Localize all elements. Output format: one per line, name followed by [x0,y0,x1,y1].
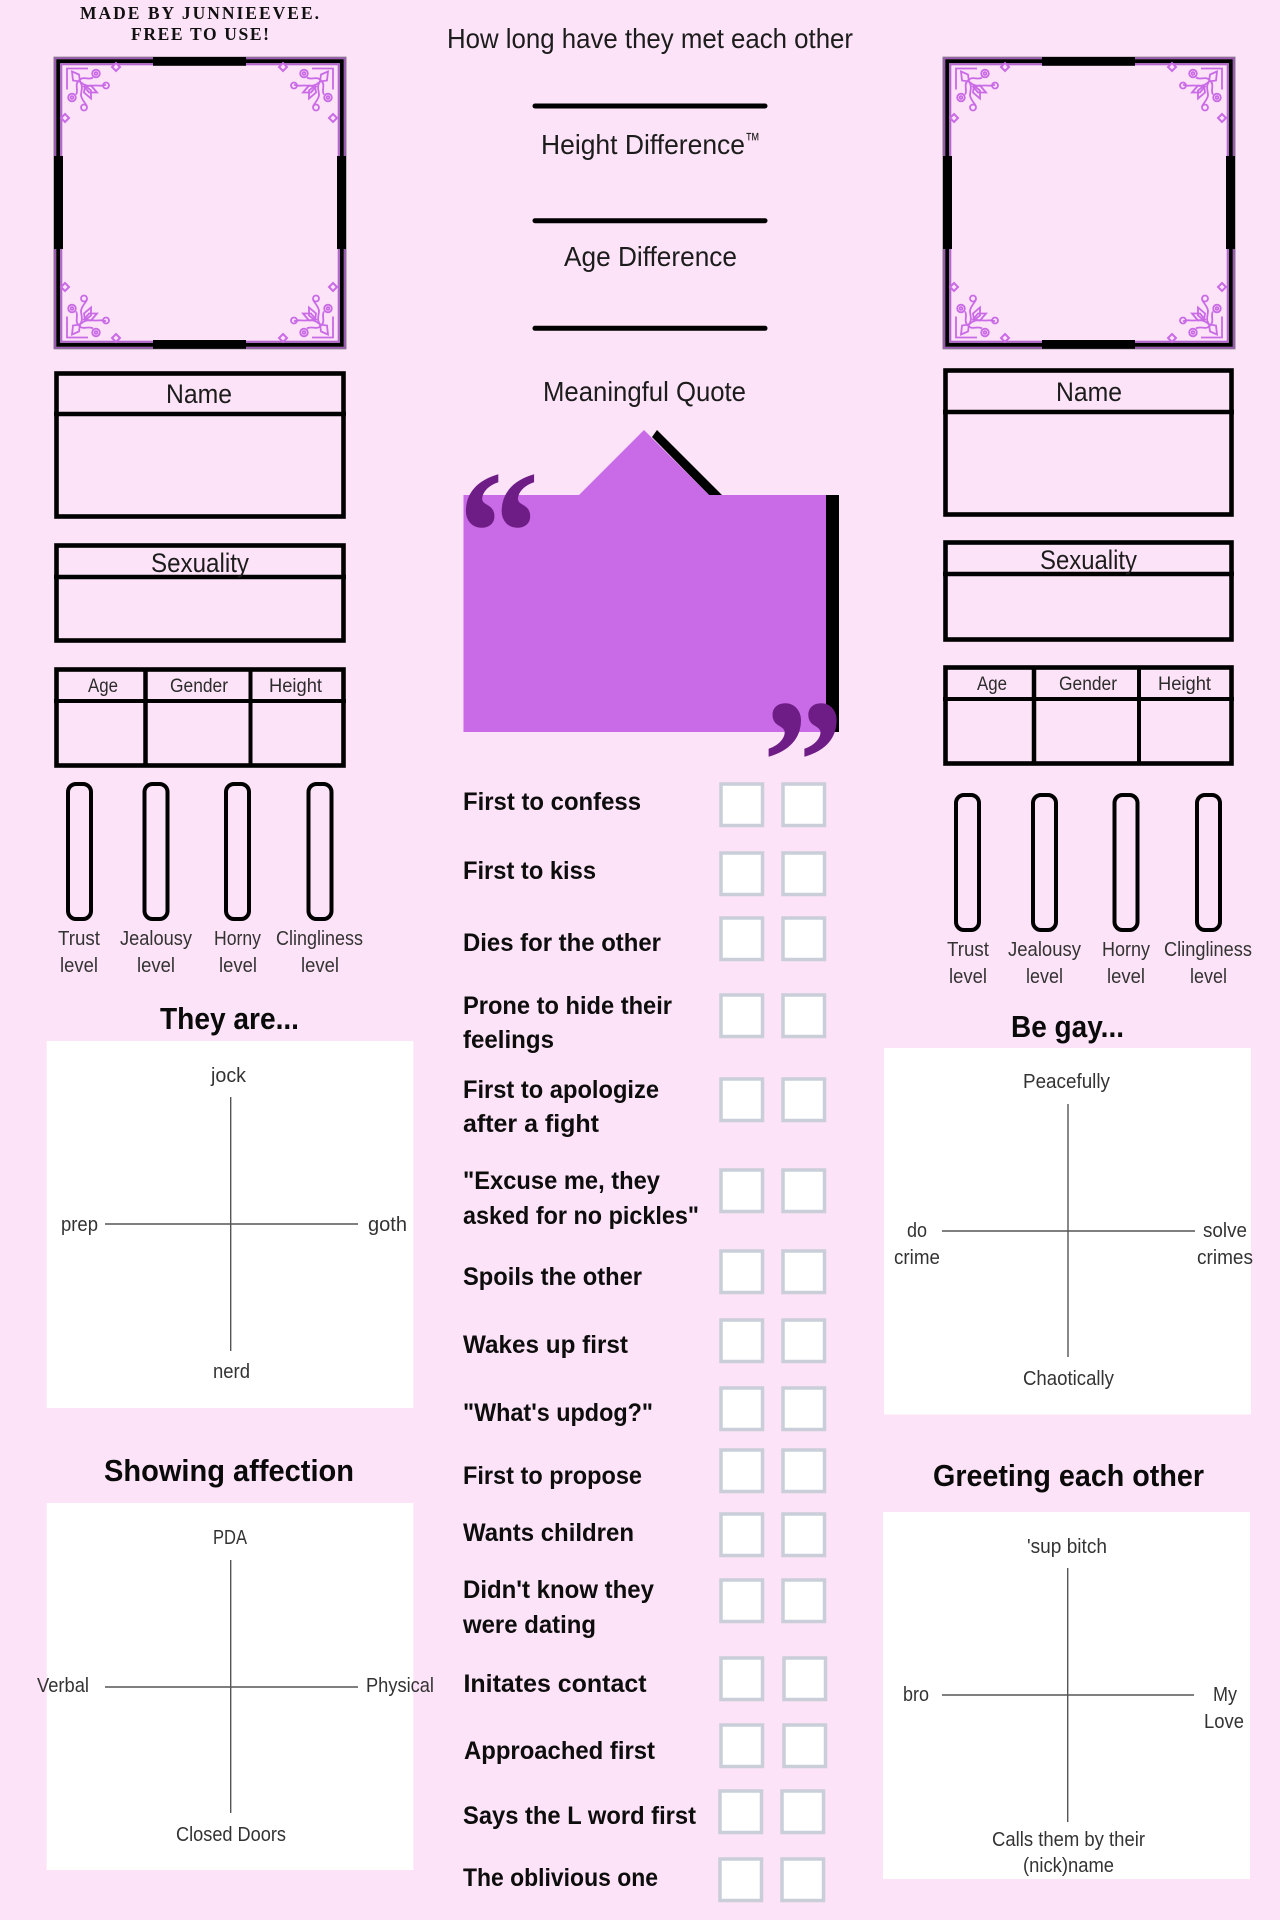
row: wakes up first: Wakes up first [463,1331,629,1359]
row: first to kiss [463,853,824,894]
row: first to apologize: after a fight [463,1110,600,1138]
level bars left: level [60,954,98,977]
row: dies for the other [463,918,824,960]
level bars left: level [301,954,339,977]
row: didn't know: were dating [462,1611,596,1639]
quote speech bubble [458,430,844,860]
row: prone to hide: Prone to hide their [463,992,672,1020]
age gender height table left [54,670,346,766]
row: first to propose: First to propose [463,1462,642,1490]
row: first to apologize: First to apologize [463,1076,659,1104]
row: prone to hide: feelings [463,1026,554,1054]
level bars left: Clingliness [276,927,363,950]
credit text: MADE BY JUNNIEEVEE. [80,3,319,23]
row: approached first [464,1725,826,1766]
row: approached first: Approached first [464,1737,656,1765]
how long heading: How long have they met each other [447,23,853,54]
row: first to propose [463,1450,824,1492]
chart: greeting each other: Love [1204,1710,1244,1733]
chart: greeting each other [883,1458,1250,1879]
chart: be gay: do [907,1219,927,1242]
credit text: FREE TO USE! [131,24,269,44]
level bars right: level [1190,965,1227,988]
age gender height table left: Height [269,675,323,697]
age gender height table right [943,668,1234,764]
chart: be gay: Peacefully [1023,1070,1111,1093]
level bars right: Trust [947,938,989,961]
level bars left [58,784,363,977]
chart: be gay: Chaotically [1023,1367,1115,1390]
sexuality box right [943,542,1234,640]
panel: left character info [54,374,363,977]
row: what's updog [463,1388,824,1430]
row: first to confess: First to confess [463,788,641,816]
chart: be gay: solve [1203,1219,1247,1242]
opening quote mark: “ [458,434,539,631]
level bars left: level [137,954,175,977]
chart: showing affection: Physical [366,1674,434,1697]
row: prone to hide [463,992,824,1054]
chart: be gay: crime [894,1246,940,1269]
level bars left: Horny [214,927,262,950]
chart: showing affection: Closed Doors [176,1823,286,1846]
row: wakes up first [463,1320,824,1362]
row: excuse me: "Excuse me, they [463,1167,660,1195]
row: spoils the other: Spoils the other [463,1263,642,1291]
level bars left: level [219,954,257,977]
level bars right: level [1107,965,1145,988]
panel: relationship stats [447,23,853,407]
level bars right: level [1026,965,1063,988]
row: what's updog: "What's updog?" [463,1399,653,1427]
chart: greeting each other: My [1213,1683,1238,1706]
level bars right: Clingliness [1164,938,1252,961]
row: excuse me [463,1167,824,1230]
checklist [462,784,826,1900]
left portrait frame [54,57,346,349]
row: excuse me: asked for no pickles" [463,1202,699,1230]
level bars right: Horny [1102,938,1151,961]
row: spoils the other [463,1251,824,1292]
age gender height table right: Gender [1059,673,1117,695]
chart: greeting each other: (nick)name [1023,1854,1114,1877]
row: first to kiss: First to kiss [463,857,596,885]
level bars right [947,795,1252,988]
level bars right: level [949,965,987,988]
chart: they are: prep [61,1213,98,1236]
row: oblivious one [463,1859,824,1900]
chart: they are: goth [368,1213,407,1236]
height difference heading: Height Difference [541,129,745,160]
row: initates contact: Initates contact [464,1670,647,1698]
panel: right character info [943,370,1252,988]
row: didn't know: Didn't know they [463,1576,654,1604]
name box left [54,374,346,516]
chart: they are [47,1001,413,1408]
credit text [80,3,319,44]
chart: greeting each other: Calls them by their [992,1828,1145,1851]
level bars left: Jealousy [120,927,193,950]
age gender height table left: Gender [170,675,228,697]
chart: showing affection: Verbal [37,1674,89,1697]
sexuality box right: Sexuality [1040,545,1137,575]
age gender height table right: Age [977,673,1007,695]
chart: showing affection [37,1453,434,1870]
chart: showing affection: PDA [213,1526,247,1549]
row: wants children [463,1514,824,1556]
chart: they are: They are... [160,1001,299,1036]
age gender height table right: Height [1158,673,1212,695]
chart: they are: jock [210,1064,247,1087]
chart: showing affection: Showing affection [104,1453,354,1488]
height difference heading: ™ [745,130,760,152]
row: wants children: Wants children [463,1519,634,1547]
meaningful quote heading: Meaningful Quote [543,376,746,407]
chart: greeting each other: Greeting each other [933,1458,1204,1493]
name box left: Name [166,379,232,409]
row: dies for the other: Dies for the other [463,929,661,957]
chart: be gay: Be gay... [1011,1009,1124,1044]
sexuality box left: Sexuality [151,548,249,578]
age difference heading: Age Difference [564,241,737,272]
row: first to confess [463,784,824,826]
age gender height table left: Age [88,675,118,697]
chart: greeting each other: bro [903,1683,929,1706]
level bars left: Trust [58,927,100,950]
chart: greeting each other: 'sup bitch [1027,1535,1107,1558]
name box right [943,370,1234,514]
sexuality box left [54,546,346,640]
row: didn't know [462,1576,824,1639]
level bars right: Jealousy [1008,938,1082,961]
row: says the l word: Says the L word first [463,1802,697,1830]
row: first to apologize [463,1076,824,1138]
chart: be gay [884,1009,1253,1414]
closing quote mark: ” [762,663,844,860]
name box right: Name [1056,377,1122,407]
right portrait frame [943,57,1235,349]
row: oblivious one: The oblivious one [463,1864,658,1892]
chart: they are: nerd [213,1360,250,1383]
chart: be gay: crimes [1197,1246,1253,1269]
row: initates contact [464,1658,826,1700]
row: says the l word [463,1791,824,1832]
